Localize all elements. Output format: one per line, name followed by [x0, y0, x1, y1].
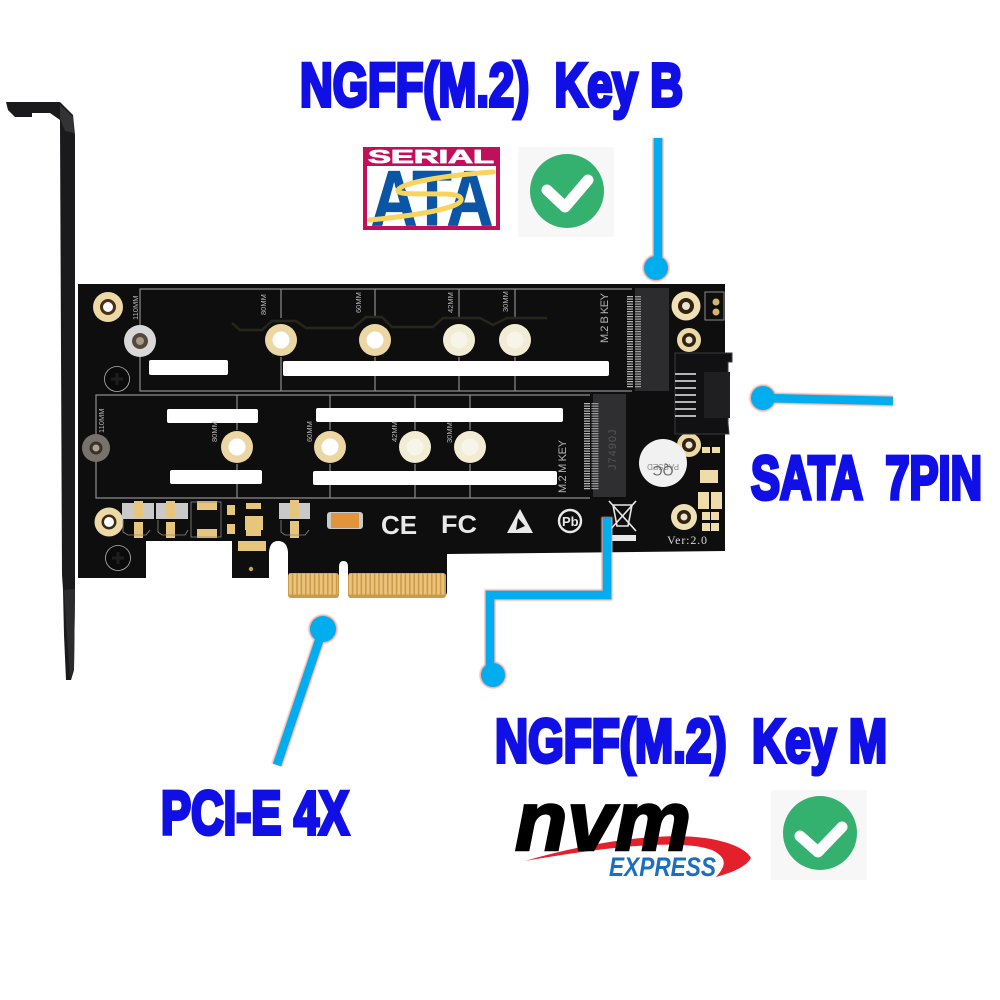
callout line: PCI-E [277, 614, 338, 765]
board silkscreen labels: 30MM [445, 422, 454, 443]
outline: upper M.2 bay [140, 289, 632, 391]
board silkscreen labels: 42MM [390, 421, 399, 442]
logo: NVM Express: EXPRESS [609, 852, 716, 882]
circuit board [78, 284, 732, 598]
board silkscreen labels: 30MM [501, 291, 510, 312]
board silkscreen labels [97, 291, 707, 547]
QC sticker: QC [652, 463, 674, 479]
board silkscreen labels: 110MM [97, 409, 106, 433]
board silkscreen labels: 60MM [305, 421, 314, 442]
silver standoffs [82, 325, 156, 462]
board silkscreen labels: 42MM [446, 292, 455, 313]
board silkscreen labels: 60MM [354, 292, 363, 313]
outline: lower M.2 bay [96, 395, 590, 498]
slot cutouts [149, 360, 609, 485]
logo: NVM Express: nvm [515, 774, 691, 868]
M.2 M connector: J7490J [607, 429, 619, 470]
gold standoff holes [221, 324, 531, 463]
certification marks: Pb [562, 514, 579, 529]
logo: Serial ATA: ATA [371, 154, 493, 242]
icon: check mark (SATA) [518, 147, 614, 237]
board silkscreen labels: 80MM [210, 421, 219, 442]
board silkscreen labels: 80MM [259, 294, 268, 315]
mounting rings [93, 292, 701, 536]
board silkscreen labels: M.2 B KEY [599, 292, 611, 343]
tantalum capacitor [327, 512, 363, 529]
SATA 7-pin connector [675, 353, 732, 434]
logo: Serial ATA: SERIAL [368, 147, 494, 167]
metal bracket [6, 102, 75, 680]
board silkscreen labels: 110MM [131, 296, 140, 320]
board silkscreen labels: Ver:2.0 [667, 533, 707, 547]
board silkscreen labels: M.2 M KEY [557, 439, 569, 493]
M.2 B connector [630, 288, 669, 391]
certification marks: FC [441, 511, 477, 539]
right-side pads [698, 292, 724, 531]
gold edge connector [288, 573, 446, 598]
M.2 M connector [587, 394, 626, 497]
QC sticker [639, 439, 687, 487]
small components lower left [122, 500, 310, 571]
QC sticker: PASSED [647, 462, 679, 471]
certification marks: CE [381, 510, 417, 540]
callout line: Key B [642, 138, 670, 282]
heading: PCI-E 4X: PCI-E 4X [161, 779, 349, 847]
callout line: SATA [750, 384, 893, 412]
heading: Key B: NGFF(M.2) Key B [300, 51, 683, 119]
logo: NVM Express [515, 774, 751, 882]
screws [104, 366, 130, 570]
callout line: Key M [480, 517, 607, 688]
certification marks [381, 501, 636, 541]
icon: check mark (NVMe) [771, 790, 867, 880]
